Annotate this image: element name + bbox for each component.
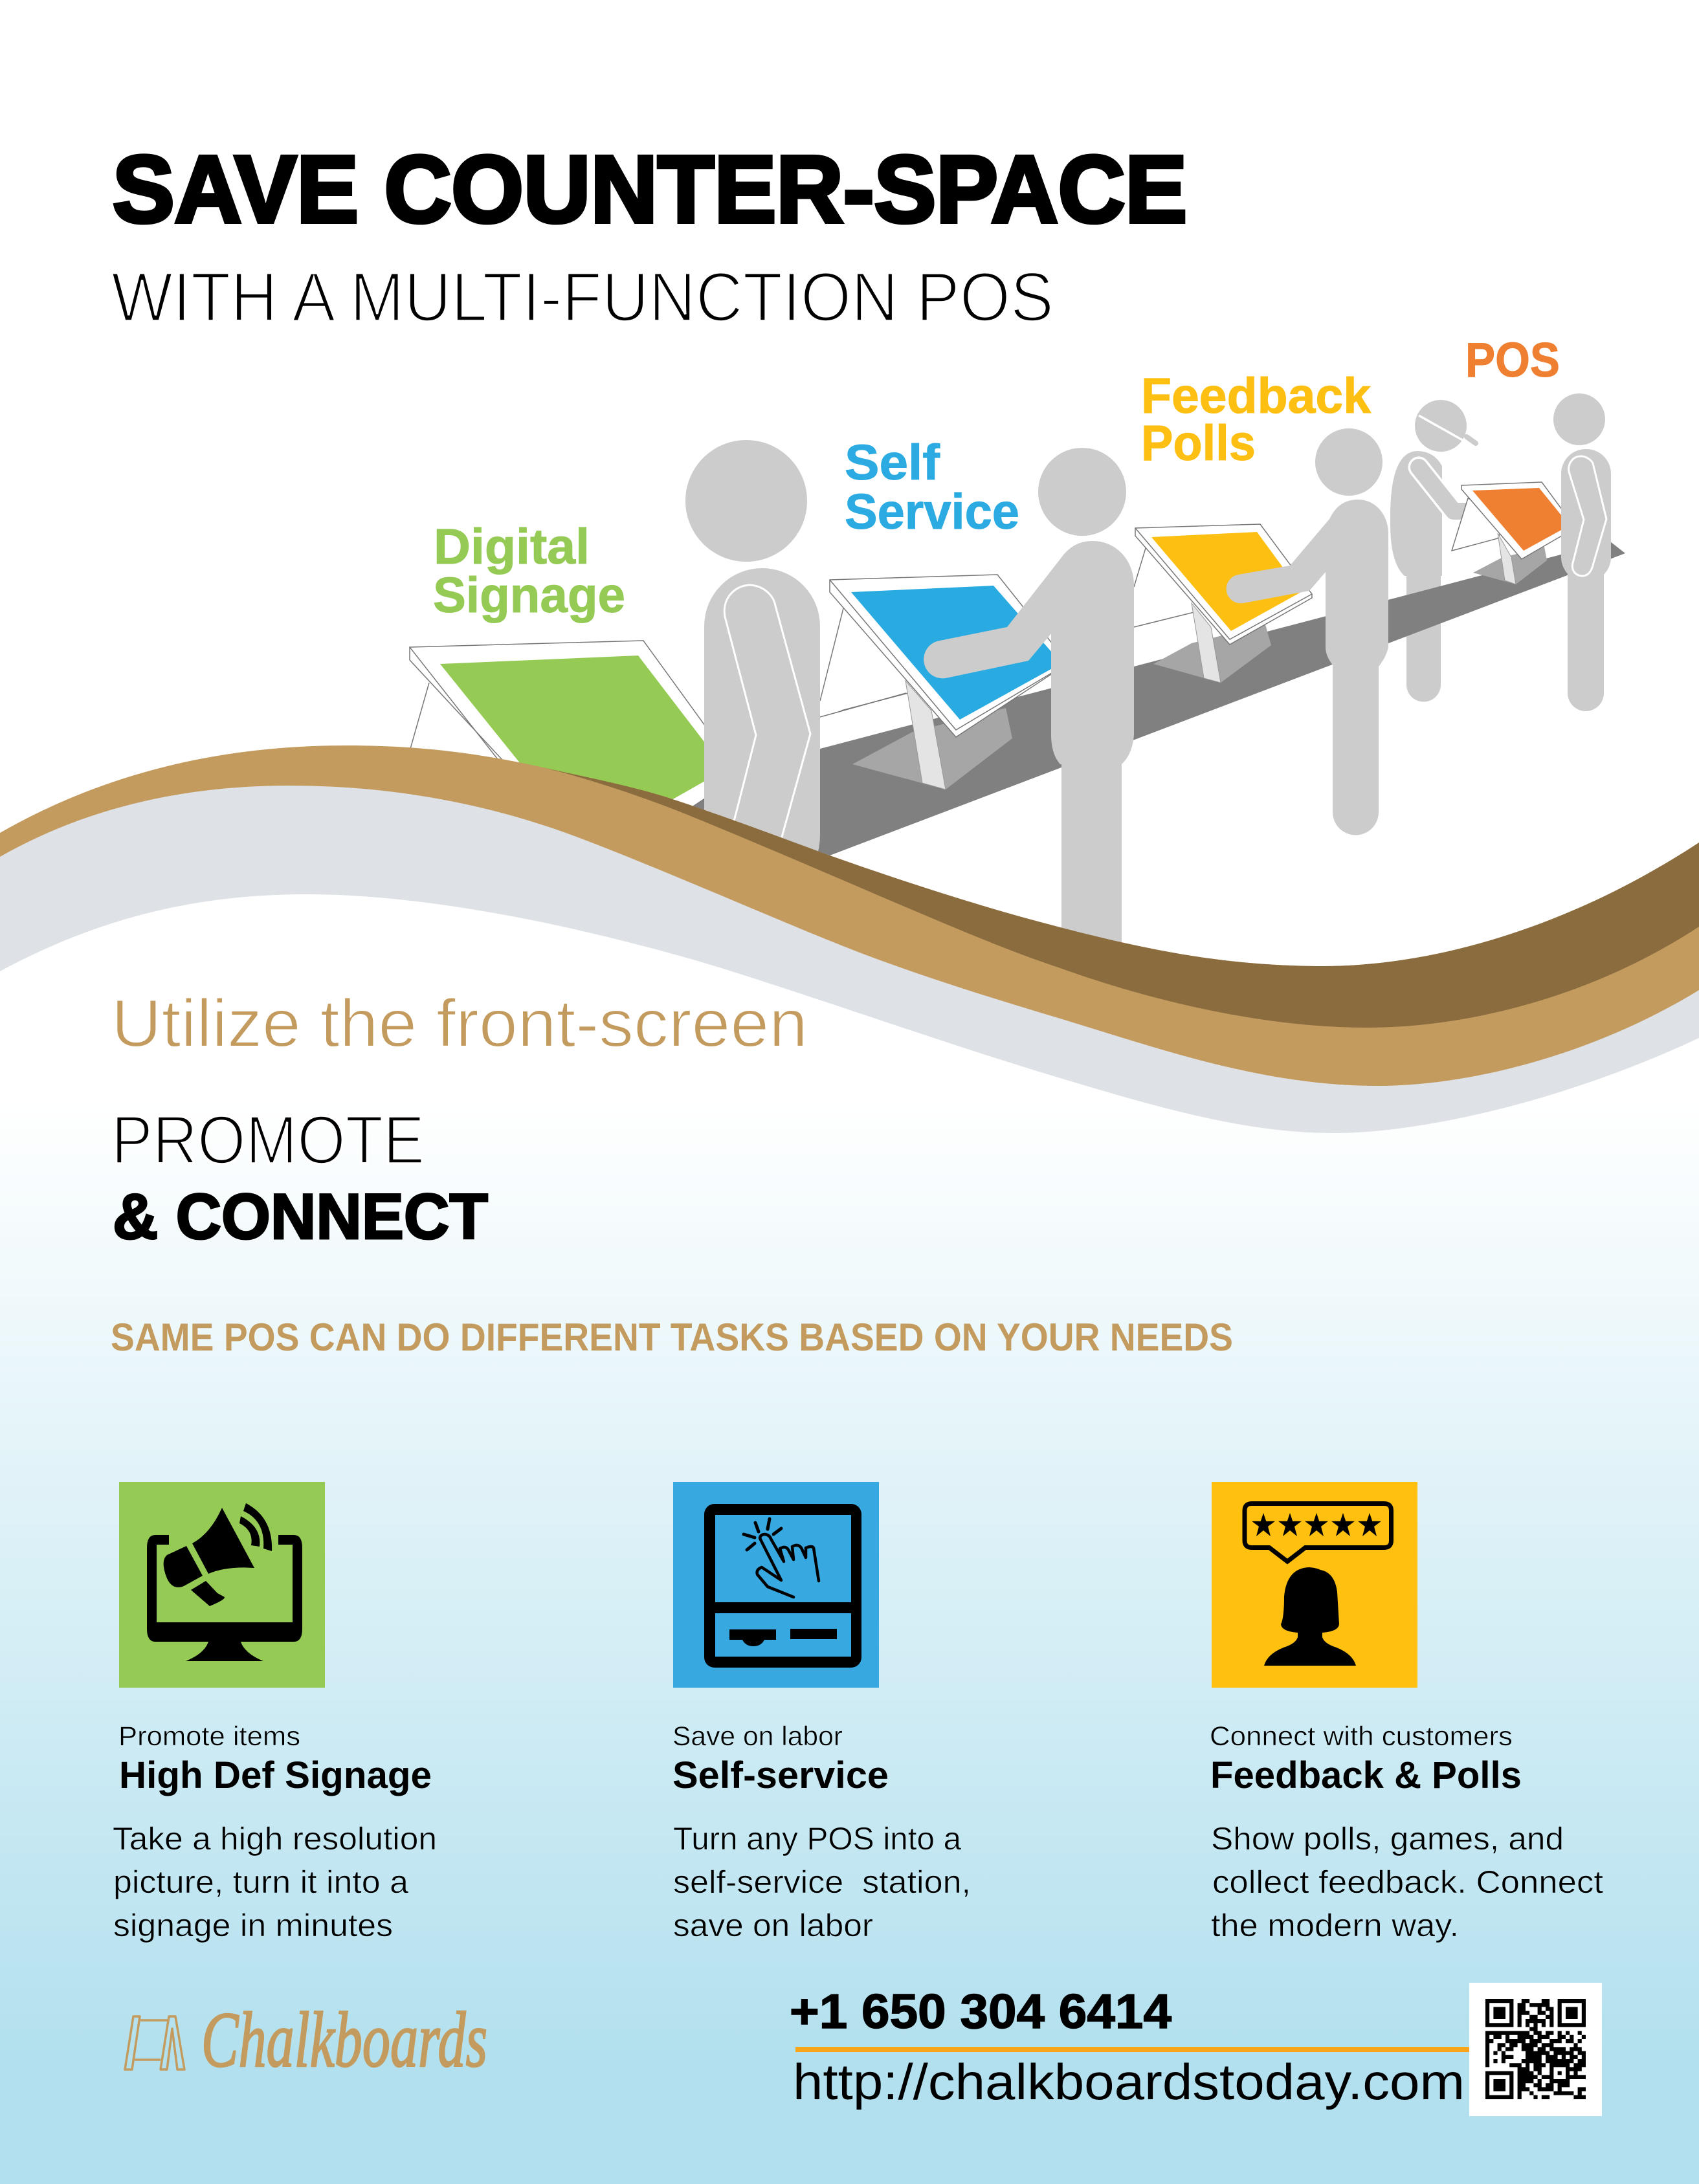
person: staff at POS xyxy=(1553,393,1611,711)
column: high def signage: High Def Signage xyxy=(119,1754,432,1796)
label: self service: Service xyxy=(845,484,1019,540)
icon: self-service kiosk with touch hand xyxy=(673,1482,879,1688)
label: digital signage: Signage xyxy=(433,568,625,623)
wave: light grey xyxy=(0,770,1699,1133)
counter top xyxy=(687,542,1625,855)
person: cashier with cap xyxy=(1390,400,1476,701)
label: self service xyxy=(845,435,1019,540)
icon: a-frame chalkboard xyxy=(125,2016,184,2069)
title: SAVE COUNTER-SPACE xyxy=(113,137,1187,243)
POS monitor: feedback polls (yellow) xyxy=(1134,524,1312,683)
logo: chalkboards xyxy=(125,1996,487,2084)
column: self-service: self-service station, xyxy=(673,1865,971,1900)
swoosh waves xyxy=(0,745,1699,1133)
column: feedback and polls: Connect with customers xyxy=(1210,1721,1513,1751)
column: self-service xyxy=(672,1721,971,1943)
column: high def signage: Take a high resolution xyxy=(113,1822,437,1857)
label: self service: Self xyxy=(845,435,940,491)
wordmark: Chalkboards xyxy=(201,1996,487,2084)
wave: dark brown xyxy=(537,766,1699,1028)
website url: http://chalkboardstoday.com xyxy=(793,2053,1465,2110)
column: self-service: Self-service xyxy=(672,1754,889,1796)
orange divider xyxy=(795,2047,1472,2052)
person: customer at blue screen xyxy=(924,448,1134,964)
label: POS: POS xyxy=(1465,333,1560,387)
column: self-service: Save on labor xyxy=(672,1721,843,1751)
illustration: queue of people at POS counter xyxy=(410,393,1625,964)
column: feedback and polls: Feedback & Polls xyxy=(1210,1754,1522,1796)
person: front-left customer xyxy=(685,440,820,861)
column: feedback and polls: collect feedback. Connect xyxy=(1212,1865,1603,1900)
phone number: +1 650 304 6414 xyxy=(790,1984,1172,2038)
label: digital signage: Digital xyxy=(434,519,590,575)
POS monitor: POS (orange) xyxy=(1452,482,1573,584)
tagline: SAME POS CAN DO DIFFERENT TASKS BASED ON YOUR NEEDS xyxy=(111,1316,1233,1359)
column: self-service: save on labor xyxy=(673,1908,873,1943)
label: digital signage xyxy=(433,519,625,623)
heading: utilize the front-screen: Utilize the front-screen xyxy=(111,986,808,1061)
person: customer at yellow screen xyxy=(1227,428,1388,835)
POS monitor: digital signage (green) xyxy=(410,641,906,828)
wave: tan xyxy=(0,745,1699,1086)
heading: and connect: & CONNECT xyxy=(113,1180,488,1252)
icon: signage monitor with megaphone xyxy=(119,1482,325,1688)
label: feedback polls: Feedback xyxy=(1141,368,1371,424)
subtitle: WITH A MULTI-FUNCTION POS xyxy=(111,258,1054,336)
POS monitor: self service (blue) xyxy=(820,575,1068,789)
column: feedback and polls xyxy=(1210,1721,1603,1943)
column: feedback and polls: Show polls, games, and xyxy=(1211,1822,1564,1857)
column: high def signage: Promote items xyxy=(118,1721,300,1751)
icon: customer rating bubble with five stars xyxy=(1212,1482,1417,1688)
column: feedback and polls: the modern way. xyxy=(1211,1908,1459,1943)
label: feedback polls: Polls xyxy=(1141,415,1256,471)
column: high def signage xyxy=(113,1721,437,1943)
column: high def signage: signage in minutes xyxy=(113,1908,393,1943)
label: feedback polls xyxy=(1141,368,1371,471)
QR code xyxy=(1469,1983,1602,2116)
heading: promote: PROMOTE xyxy=(111,1102,425,1178)
column: self-service: Turn any POS into a xyxy=(673,1822,962,1857)
column: high def signage: picture, turn it into a xyxy=(113,1865,409,1900)
